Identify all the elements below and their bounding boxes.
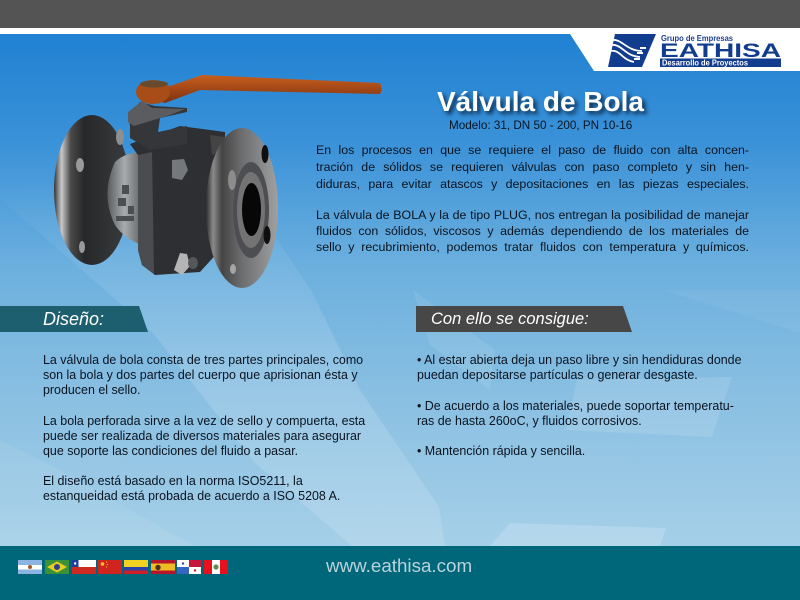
intro text: En los procesos en que se requiere el paso de fluido con alta concen- bbox=[316, 143, 749, 157]
intro text: La válvula de BOLA y la de tipo PLUG, nos entregan la posibilidad de manejar bbox=[316, 208, 749, 222]
text: Con ello se consigue bbox=[417, 353, 742, 458]
stem and gland bbox=[128, 102, 187, 150]
text: Con ello se consigue: • De acuerdo a los materiales, puede soportar temperatu- bbox=[417, 399, 734, 413]
title block bbox=[437, 86, 650, 132]
website: www.eathisa.com bbox=[326, 555, 472, 576]
intro text: diduras, para evitar atascos y depositaciones en las piezas especiales. bbox=[316, 177, 749, 191]
logo panel bbox=[570, 34, 800, 71]
text: Diseño: producen el sello. bbox=[43, 383, 140, 397]
orange lever handle bbox=[136, 75, 382, 104]
flag: Colombia bbox=[124, 560, 148, 574]
text: Con ello se consigue: ras de hasta 260oC, y fluidos corrosivos. bbox=[417, 414, 642, 428]
left flange bbox=[54, 115, 130, 265]
text: Diseño: son la bola y dos partes del cuerpo que aprisionan ésta y bbox=[43, 368, 358, 382]
valve image bbox=[54, 75, 382, 288]
ball body bbox=[108, 152, 145, 246]
intro text bbox=[316, 143, 749, 254]
flag: Chile bbox=[72, 560, 96, 574]
body lettering bbox=[116, 185, 134, 221]
flag: Spain bbox=[151, 560, 175, 574]
center body block bbox=[130, 126, 225, 275]
panel heading: Con ello se consigue bbox=[416, 306, 632, 332]
right flange bbox=[206, 128, 278, 288]
panel heading: Diseño bbox=[0, 306, 148, 332]
top grey bar bbox=[0, 0, 800, 28]
subtitle: Modelo: 31, DN 50 - 200, PN 10-16 bbox=[449, 119, 632, 132]
flag: Peru bbox=[204, 560, 228, 574]
text: Diseño bbox=[43, 353, 366, 503]
text: Diseño: La bola perforada sirve a la vez de sello y compuerta, esta bbox=[43, 414, 365, 428]
text: Diseño: La válvula de bola consta de tres partes principales, como bbox=[43, 353, 363, 367]
flags bbox=[18, 560, 228, 574]
logo text bbox=[660, 34, 781, 68]
flag: Panama bbox=[177, 560, 201, 574]
panel heading: Con ello se consigue: Con ello se consigue: bbox=[431, 310, 589, 328]
text: Con ello se consigue: • Mantención rápida y sencilla. bbox=[417, 444, 585, 458]
footer bar bbox=[0, 546, 800, 600]
text: Diseño: que soporte las condiciones del fluido a pasar. bbox=[43, 444, 298, 458]
heading: Válvula de Bola bbox=[437, 86, 644, 117]
text: Con ello se consigue: • Al estar abierta deja un paso libre y sin hendiduras donde bbox=[417, 353, 742, 367]
bolts bbox=[172, 159, 188, 180]
flag: Brazil bbox=[45, 560, 69, 574]
icon: logo emblem bbox=[608, 34, 656, 67]
logo text: Desarrollo de Proyectos bbox=[662, 59, 749, 68]
white stripe bbox=[0, 28, 800, 34]
panel heading: Diseño: Diseño: bbox=[43, 309, 104, 329]
intro text: sello y recubrimiento, podemos tratar fluidos con temperatura y químicos. bbox=[316, 240, 749, 254]
text: Con ello se consigue: puedan depositarse partículas o generar desgaste. bbox=[417, 368, 698, 382]
logo text: Grupo de Empresas bbox=[661, 34, 733, 43]
logo text: EATHISA bbox=[660, 41, 781, 62]
text: Diseño: puede ser realizada de diversos materiales para asegurar bbox=[43, 429, 361, 443]
intro text: fluidos con sólidos, viscosos y además dependiendo de los materiales de bbox=[316, 224, 749, 238]
text: Diseño: estanqueidad está probada de acuerdo a ISO 5208 A. bbox=[43, 489, 340, 503]
text: Diseño: El diseño está basado en la norma ISO5211, la bbox=[43, 474, 303, 488]
flag: Argentina bbox=[18, 560, 42, 574]
intro text: tración de sólidos se requieren válvulas con paso completo y sin hen- bbox=[316, 160, 749, 174]
flag: China bbox=[98, 560, 122, 574]
